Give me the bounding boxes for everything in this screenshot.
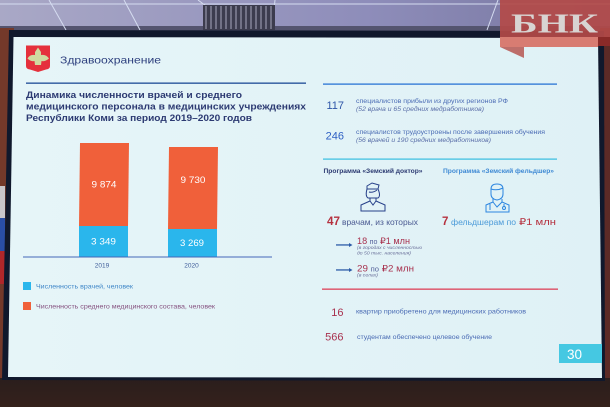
icon: nurse — [361, 183, 385, 211]
chart title: медицинского персонала в медицинских учреждениях — [26, 102, 306, 112]
text: 18 by 1 million: 18 по ₽1 млн — [357, 236, 410, 246]
programme: Zemsky feldsher: Программа «Земский фельдшер» — [443, 168, 555, 175]
stat: 566: 566 — [325, 332, 344, 344]
icon: doctor with stethoscope — [486, 184, 509, 212]
stat: 246: 246 — [326, 130, 344, 142]
stat: 246: (56 врачей и 190 средних медработников) — [356, 137, 491, 144]
chart title: Динамика численности врачей и среднего — [26, 90, 243, 100]
stat: 246 — [326, 128, 545, 144]
bar 2020 — [168, 147, 218, 270]
page number — [559, 344, 602, 363]
text: 47 doctors: врачам, из которых — [342, 217, 419, 227]
BNK watermark logo: БНК — [511, 8, 599, 38]
bar 2019: 9 874 — [92, 180, 116, 190]
programme: Zemsky doctor: Программа «Земский доктор» — [324, 168, 423, 175]
stat: 117: 117 — [326, 100, 344, 112]
programme: Zemsky feldsher — [442, 168, 556, 228]
stacked bar chart — [23, 143, 272, 270]
text: 18 by 1 million: до 50 тыс. населения) — [357, 250, 412, 256]
section heading: Здравоохранение — [60, 54, 161, 66]
chart title — [26, 90, 306, 123]
stat: 117: (52 врача и 65 средних медработников) — [356, 107, 484, 113]
stat: 117 — [326, 97, 508, 113]
stat: 16 — [331, 307, 527, 319]
bar 2019: 2019 — [95, 262, 110, 270]
stat: 246: специалистов трудоустроены после завершения обучения — [356, 128, 545, 136]
text: 18 by 1 million: (в городах с численностью — [357, 245, 423, 250]
bar 2020: 3 269 — [180, 238, 204, 249]
bar 2020: 2020 — [184, 262, 199, 270]
stat: 16: 16 — [331, 307, 344, 319]
text: 47 doctors: 47 — [327, 216, 340, 228]
text: 47 doctors — [327, 216, 419, 228]
text: 7 feldshers: ₽1 млн — [519, 217, 556, 228]
legend — [23, 282, 215, 310]
BNK watermark logo — [500, 0, 610, 58]
bar 2019: 3 349 — [91, 236, 116, 248]
stat: 16: квартир приобретено для медицинских работников — [356, 308, 527, 316]
bar 2020: 9 730 — [180, 175, 206, 186]
text: 18 by 1 million — [357, 236, 423, 256]
programme: Zemsky doctor — [324, 168, 423, 278]
icon: Komi coat of arms — [26, 46, 50, 72]
stat: 566: студентам обеспечено целевое обучение — [357, 333, 493, 341]
top stats block — [323, 84, 557, 160]
legend: Численность среднего медицинского состава, человек — [36, 304, 215, 310]
text: 29 by 2 million: (в селах) — [357, 272, 379, 278]
text: 7 feldshers: 7 — [442, 216, 448, 228]
stat: 117: специалистов прибыли из других регионов РФ — [356, 97, 508, 105]
bottom stats block — [322, 288, 558, 344]
page number: 30 — [567, 347, 582, 362]
arrow — [336, 268, 352, 272]
bar 2019 — [79, 143, 129, 270]
text: 29 by 2 million: 29 по ₽2 млн — [357, 264, 414, 274]
legend: Численность врачей, человек — [36, 284, 133, 290]
header — [26, 46, 306, 84]
text: 7 feldshers: фельдшерам по — [451, 217, 516, 227]
text: 7 feldshers — [442, 216, 556, 228]
room ceiling — [0, 0, 610, 32]
arrow — [336, 243, 352, 247]
chart title: Республики Коми за период 2019–2020 годов — [26, 113, 253, 123]
stat: 566 — [325, 332, 493, 344]
text: 29 by 2 million — [357, 264, 414, 278]
